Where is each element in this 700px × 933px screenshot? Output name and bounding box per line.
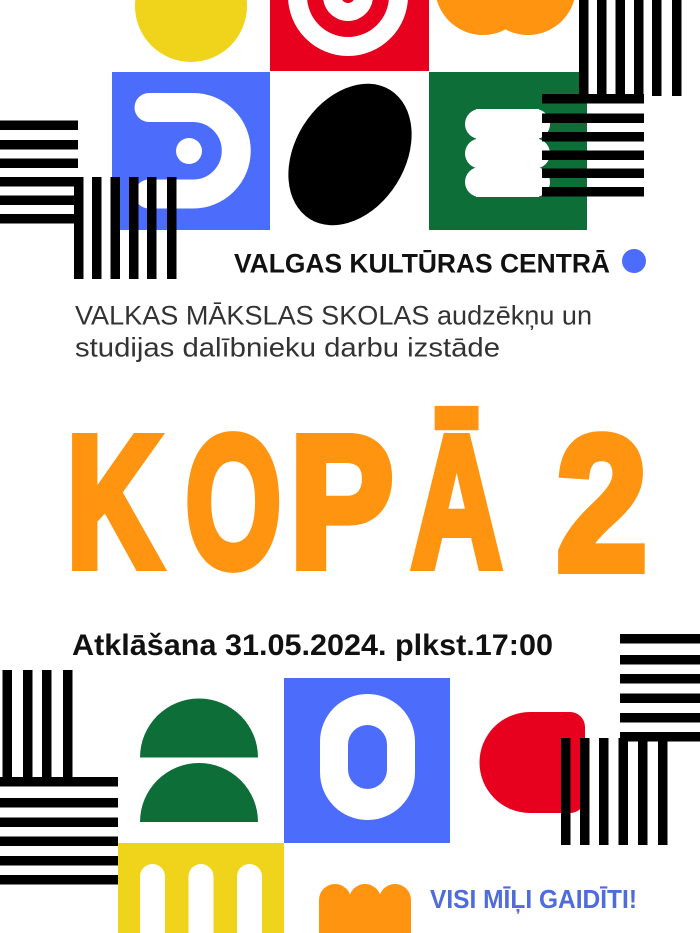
icon: blue dot — [622, 249, 646, 273]
description text — [75, 300, 592, 362]
description text: VALKAS MĀKSLAS SKOLAS audzēkņu un — [75, 300, 592, 330]
stripes: bottom right — [561, 634, 700, 845]
venue heading: VALGAS KULTŪRAS CENTRĀ — [234, 248, 610, 278]
stripes: top right — [542, 0, 682, 196]
title: O — [185, 396, 281, 606]
stripes: bottom left — [0, 670, 118, 884]
title: K — [66, 396, 162, 606]
icon: yellow circle — [135, 0, 247, 62]
icon: black tilted oval — [263, 61, 437, 248]
icon: orange three-lobed shape — [319, 884, 411, 933]
icon: red rounded shape — [480, 712, 585, 813]
panel: blue square with white D shape — [112, 72, 270, 230]
panel: yellow square with white arches — [118, 843, 284, 933]
title: Ā — [411, 396, 502, 606]
panel: blue square with white O — [284, 678, 450, 843]
welcome message: VISI MĪĻI GAIDĪTI! — [430, 884, 637, 914]
panel: red square with concentric rings — [270, 0, 429, 71]
panel: green square with white lobed shape — [429, 72, 587, 230]
icon: orange double lobe — [435, 0, 576, 35]
title: P — [290, 396, 394, 606]
opening date: Atklāšana 31.05.2024. plkst.17:00 — [72, 629, 553, 662]
description text: studijas dalībnieku darbu izstāde — [75, 332, 500, 362]
stripes: top left — [0, 120, 176, 279]
icon: green semicircles — [140, 698, 258, 822]
title: 2 — [556, 396, 647, 610]
